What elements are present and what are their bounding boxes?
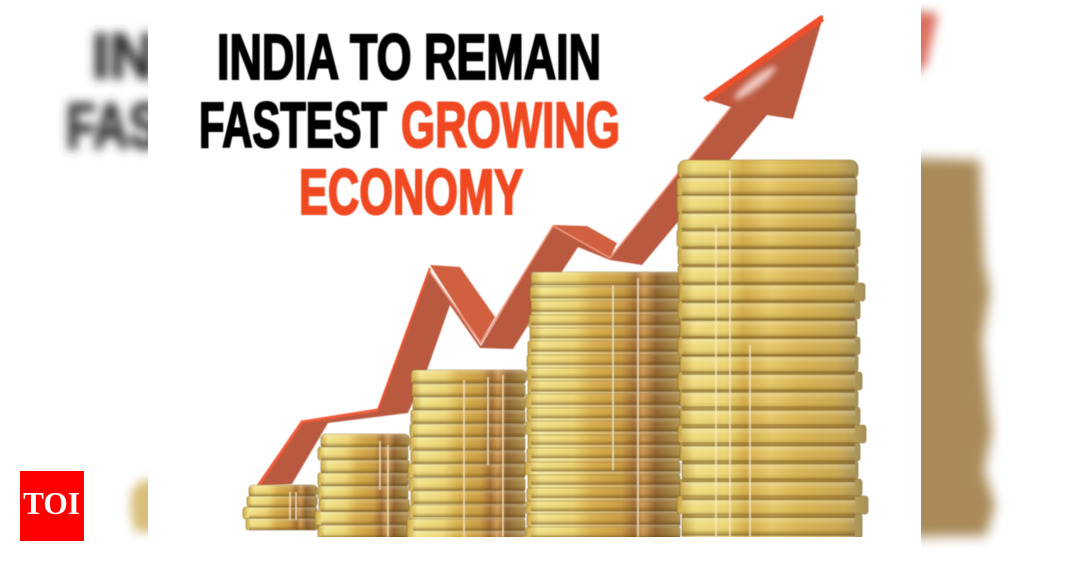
coin stack 4: [525, 272, 680, 538]
main white panel: [148, 0, 921, 580]
coin stacks: [243, 160, 868, 538]
blurred backdrop: left title fragment: INDI: [92, 20, 217, 92]
blurred backdrop: left title fragment: [66, 20, 217, 162]
growth arrow: [258, 15, 824, 486]
blurred backdrop: right arrow fragment: [900, 8, 938, 84]
TOI logo: [20, 471, 84, 541]
title line 1: INDIA TO REMAIN: [217, 21, 601, 93]
coin highlights: [290, 170, 750, 537]
coin stack 2: [315, 434, 409, 538]
title line 2 black: FASTEST: [199, 89, 387, 161]
coin stack 1: [243, 485, 318, 530]
blurred backdrop: left coins: [131, 478, 160, 532]
title line 2 red: GROWING: [401, 89, 620, 161]
blurred backdrop: right coins: [900, 158, 995, 537]
coin stack 3: [407, 370, 526, 538]
TOI logo: TOI: [23, 485, 80, 521]
title line 3: ECONOMY: [299, 156, 523, 228]
coin stack 5: [677, 160, 868, 538]
title: [199, 21, 620, 228]
blurred backdrop: left title fragment: FAST: [66, 90, 191, 162]
